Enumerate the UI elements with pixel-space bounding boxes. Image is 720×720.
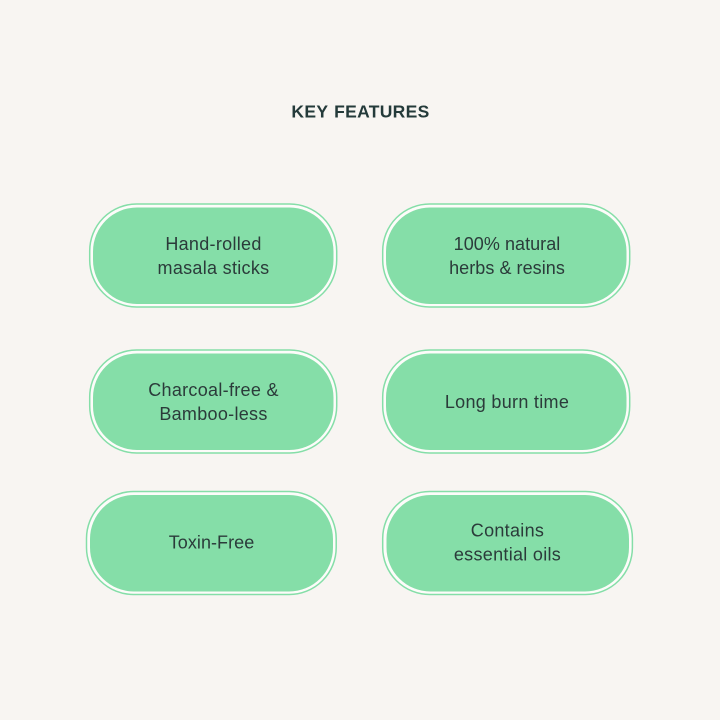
panel: charcoal-free and bamboo-less: Charcoal-free &: [148, 380, 279, 400]
title: KEY FEATURES: [291, 102, 430, 122]
panel: long burn time: Long burn time: [445, 392, 569, 412]
panel: 100% natural herbs and resins: [383, 204, 630, 307]
panel: 100% natural herbs and resins: 100% natural: [454, 234, 560, 254]
panel: charcoal-free and bamboo-less: [90, 350, 337, 453]
panel: hand-rolled masala sticks: [90, 204, 337, 307]
panel: long burn time: [383, 350, 630, 453]
panel: contains essential oils: essential oils: [454, 544, 561, 564]
panel: hand-rolled masala sticks: masala sticks: [158, 258, 269, 278]
panel: hand-rolled masala sticks: Hand-rolled: [165, 234, 262, 254]
panel: charcoal-free and bamboo-less: Bamboo-less: [159, 404, 268, 424]
panel: contains essential oils: [383, 492, 632, 594]
panel: toxin-free: Toxin-Free: [169, 532, 254, 552]
panel: contains essential oils: Contains: [471, 520, 544, 540]
panel: 100% natural herbs and resins: herbs & resins: [449, 258, 565, 278]
panel: toxin-free: [86, 492, 336, 594]
